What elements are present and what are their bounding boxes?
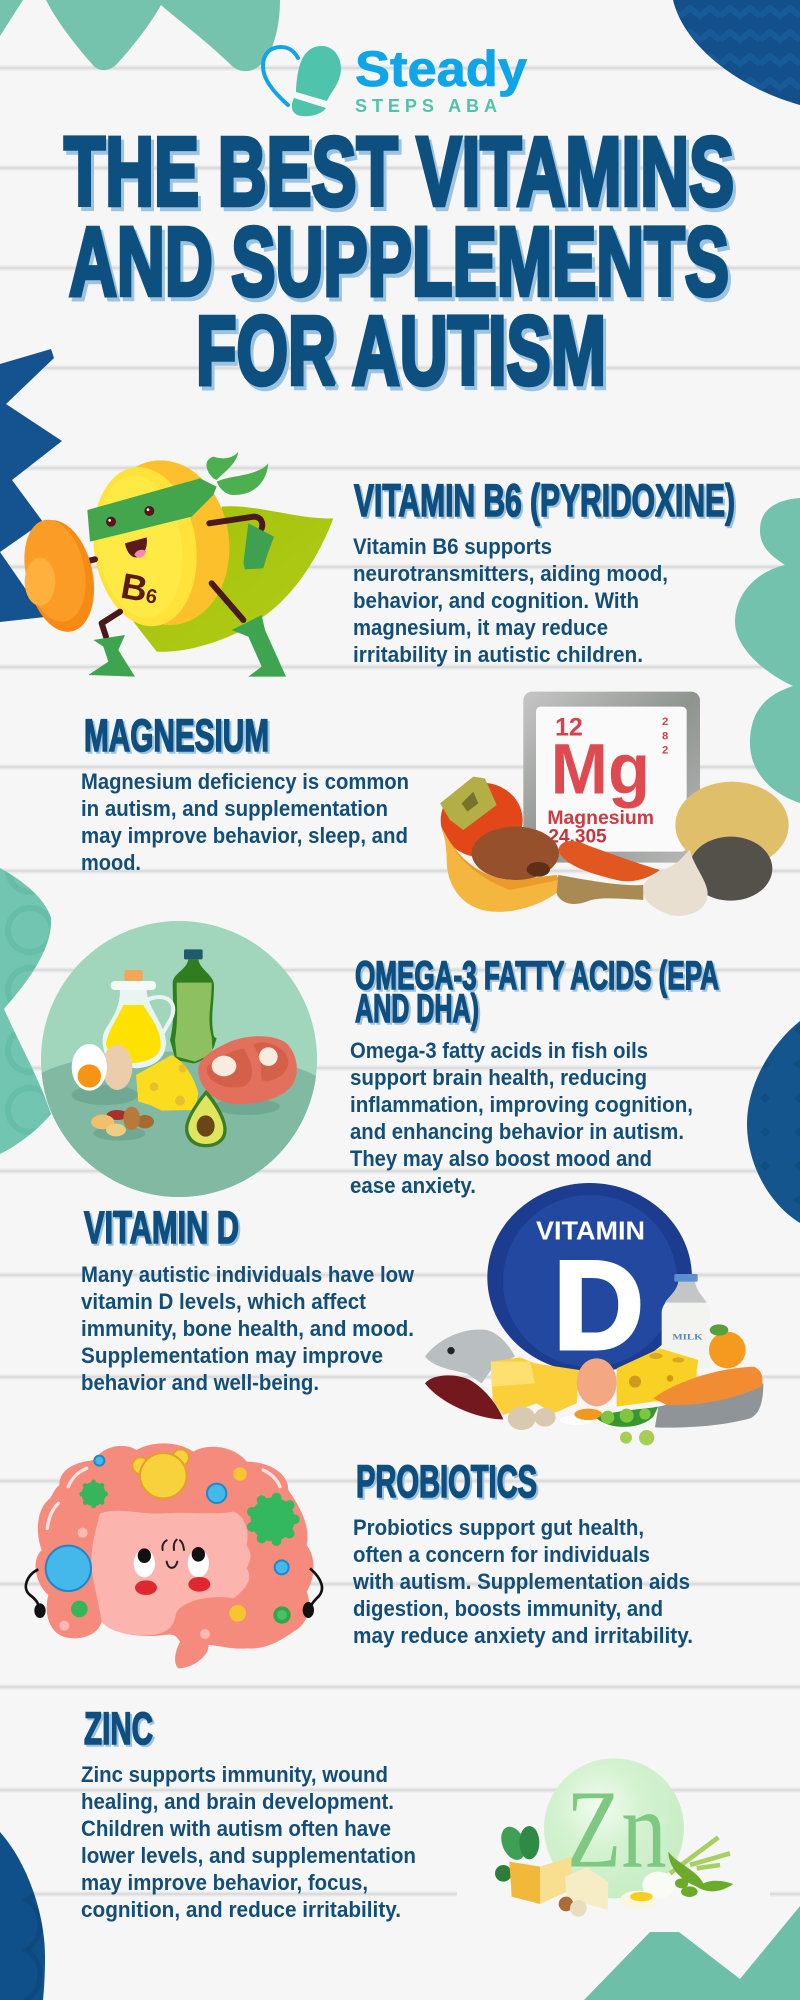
- element card: 2: [662, 716, 668, 728]
- logo wordmark: Steady: [355, 41, 527, 97]
- text: vitamin D: behavior and well-being.: [81, 1370, 319, 1395]
- green microbes: [71, 1482, 295, 1624]
- arms: [26, 1568, 322, 1618]
- text: zinc: cognition, and reduce irritability.: [81, 1897, 401, 1922]
- text: vitamin B6: Vitamin B6 supports: [353, 534, 552, 559]
- banana: [440, 823, 562, 912]
- garlic: [643, 850, 708, 916]
- dark root: [689, 837, 772, 901]
- brown fruit: [472, 827, 559, 880]
- meat: [198, 1036, 297, 1104]
- heading: omega-3: [355, 954, 719, 1031]
- fish: [425, 1329, 515, 1383]
- bottle: [170, 949, 217, 1063]
- food shadows: [72, 1085, 280, 1141]
- illustration: zinc and foods: [495, 1758, 733, 1917]
- text: vitamin B6: magnesium, it may reduce: [353, 615, 608, 640]
- highlights: [47, 1468, 280, 1528]
- salmon: [653, 1367, 763, 1428]
- circle background: [41, 921, 317, 1197]
- text: omega-3: Omega-3 fatty acids in fish oils: [350, 1038, 648, 1063]
- mouth: [125, 537, 147, 557]
- illustration: vitamin B6 hero: [16, 452, 333, 677]
- edamame: [668, 1852, 733, 1897]
- decoration: blue shape bottom left: [0, 1832, 45, 2000]
- element card: 2: [662, 744, 668, 756]
- cheese: [136, 1055, 198, 1111]
- text: magnesium: Magnesium deficiency is common: [81, 769, 409, 794]
- text: zinc: healing, and brain development.: [81, 1789, 394, 1814]
- illustration: smiling gut: [26, 1443, 322, 1668]
- gut inner: [91, 1511, 251, 1635]
- B6 label: B6: [118, 565, 162, 612]
- heading: zinc: ZINC: [84, 1703, 153, 1754]
- yellow microbes: [229, 1467, 247, 1622]
- heading: omega-3: AND DHA): [355, 987, 479, 1031]
- element card: 12: [555, 714, 583, 742]
- text: probiotics: often a concern for individuals: [353, 1542, 650, 1567]
- heading: probiotics: PROBIOTICS: [356, 1456, 537, 1507]
- text: zinc: [81, 1762, 416, 1922]
- illustration: omega-3 foods in circle: [41, 921, 317, 1197]
- nuts: [559, 1897, 587, 1917]
- text: probiotics: may reduce anxiety and irritability.: [353, 1623, 693, 1648]
- tablet: [90, 452, 240, 633]
- cheese wedge: [565, 1867, 608, 1910]
- oil jug: [103, 970, 173, 1068]
- gut outer: [36, 1443, 314, 1668]
- ginger: [557, 875, 643, 904]
- celeriac: [675, 782, 789, 868]
- element card: 8: [662, 730, 668, 742]
- stalks: [670, 1837, 730, 1873]
- text: zinc: lower levels, and supplementation: [81, 1843, 416, 1868]
- carrot: [558, 841, 660, 881]
- text: omega-3: support brain health, reducing: [350, 1065, 647, 1090]
- text: zinc: Zinc supports immunity, wound: [81, 1762, 388, 1787]
- butter cubes: [491, 1357, 579, 1415]
- cheese: [617, 1348, 698, 1407]
- text: vitamin B6: irritability in autistic children.: [353, 642, 643, 667]
- logo tagline: STEPS ABA: [355, 96, 497, 116]
- peas: [597, 1407, 658, 1445]
- text: omega-3: inflammation, improving cognition,: [350, 1092, 693, 1117]
- text: omega-3: They may also boost mood and: [350, 1146, 652, 1171]
- fried egg: [560, 1409, 602, 1425]
- title: [64, 117, 734, 405]
- bear microbe: [132, 1449, 189, 1498]
- mask: [87, 478, 217, 542]
- decoration: blue corner top right: [673, 0, 800, 105]
- text: probiotics: [352, 1515, 693, 1648]
- heading: vitamin D: VITAMIN D: [84, 1202, 239, 1253]
- decoration: teal shape left: [0, 868, 51, 1154]
- text: magnesium: [81, 769, 409, 875]
- text: probiotics: digestion, boosts immunity, and: [353, 1596, 663, 1621]
- element card: [523, 692, 700, 863]
- text: probiotics: Probiotics support gut health,: [353, 1515, 644, 1540]
- element card: Magnesium: [547, 808, 654, 829]
- persimmon: [441, 783, 523, 857]
- logo icon: heart and footprint: [263, 46, 341, 116]
- milk bottle: [662, 1274, 710, 1368]
- eggs: [620, 1872, 674, 1909]
- title: FOR AUTISM: [196, 296, 606, 405]
- decoration: blue spikes left: [0, 349, 62, 622]
- big D: D: [553, 1236, 644, 1375]
- nuts: [91, 1107, 154, 1136]
- zinc symbol: Zn: [566, 1768, 667, 1892]
- text: magnesium: in autism, and supplementation: [81, 796, 388, 821]
- cape: [133, 506, 333, 652]
- boots: [88, 615, 286, 677]
- mushrooms: [508, 1407, 556, 1430]
- blue microbes: [46, 1456, 289, 1591]
- element card: Mg: [551, 730, 650, 809]
- liver: [425, 1375, 503, 1419]
- text: probiotics: with autism. Supplementation aids: [352, 1569, 690, 1594]
- text: vitamin B6: [353, 534, 668, 667]
- avocado: [185, 1090, 227, 1147]
- eggs: [72, 1044, 132, 1091]
- text: vitamin D: Supplementation may improve: [81, 1343, 383, 1368]
- orange: [709, 1324, 746, 1368]
- text: magnesium: may improve behavior, sleep, and: [81, 823, 408, 848]
- leafy greens: [495, 1823, 539, 1882]
- text: vitamin D: immunity, bone health, and mood.: [81, 1316, 414, 1341]
- glove: [243, 523, 274, 569]
- illustration: vitamin D and foods: [425, 1183, 763, 1445]
- cheese block: [509, 1857, 572, 1904]
- zinc sphere: [544, 1758, 684, 1898]
- text: vitamin D: [81, 1262, 415, 1395]
- text: omega-3: ease anxiety.: [350, 1173, 476, 1198]
- decoration: teal mountains bottom right: [584, 1906, 800, 2000]
- eyes: [106, 506, 154, 527]
- text: vitamin D: vitamin D levels, which affect: [81, 1289, 367, 1314]
- milk bottle: MILK: [672, 1331, 703, 1341]
- heading: magnesium: MAGNESIUM: [84, 710, 269, 761]
- mask ties: [206, 452, 268, 495]
- text: zinc: Children with autism often have: [81, 1816, 391, 1841]
- text: zinc: may improve behavior, focus,: [81, 1870, 368, 1895]
- text: omega-3: [350, 1038, 693, 1198]
- element card: 24.305: [548, 827, 607, 848]
- logo: [263, 41, 527, 116]
- text: vitamin B6: neurotransmitters, aiding mood,: [353, 561, 668, 586]
- decoration: teal scallops top left: [0, 0, 280, 71]
- text: omega-3: and enhancing behavior in autism.: [350, 1119, 684, 1144]
- text: vitamin B6: behavior, and cognition. With: [353, 588, 639, 613]
- decoration: blue blob right: [747, 1021, 800, 1223]
- limbs: [89, 517, 262, 637]
- pink dots: [59, 1528, 210, 1639]
- shield: [16, 514, 104, 638]
- disc label: VITAMIN: [536, 1215, 645, 1245]
- blue disc: [487, 1183, 692, 1372]
- illustration: magnesium element card and foods: [440, 692, 789, 916]
- egg: [577, 1358, 617, 1406]
- text: vitamin D: Many autistic individuals have low: [81, 1262, 415, 1287]
- decoration: teal blob right: [735, 498, 800, 803]
- text: magnesium: mood.: [81, 850, 141, 875]
- face: [134, 1540, 210, 1595]
